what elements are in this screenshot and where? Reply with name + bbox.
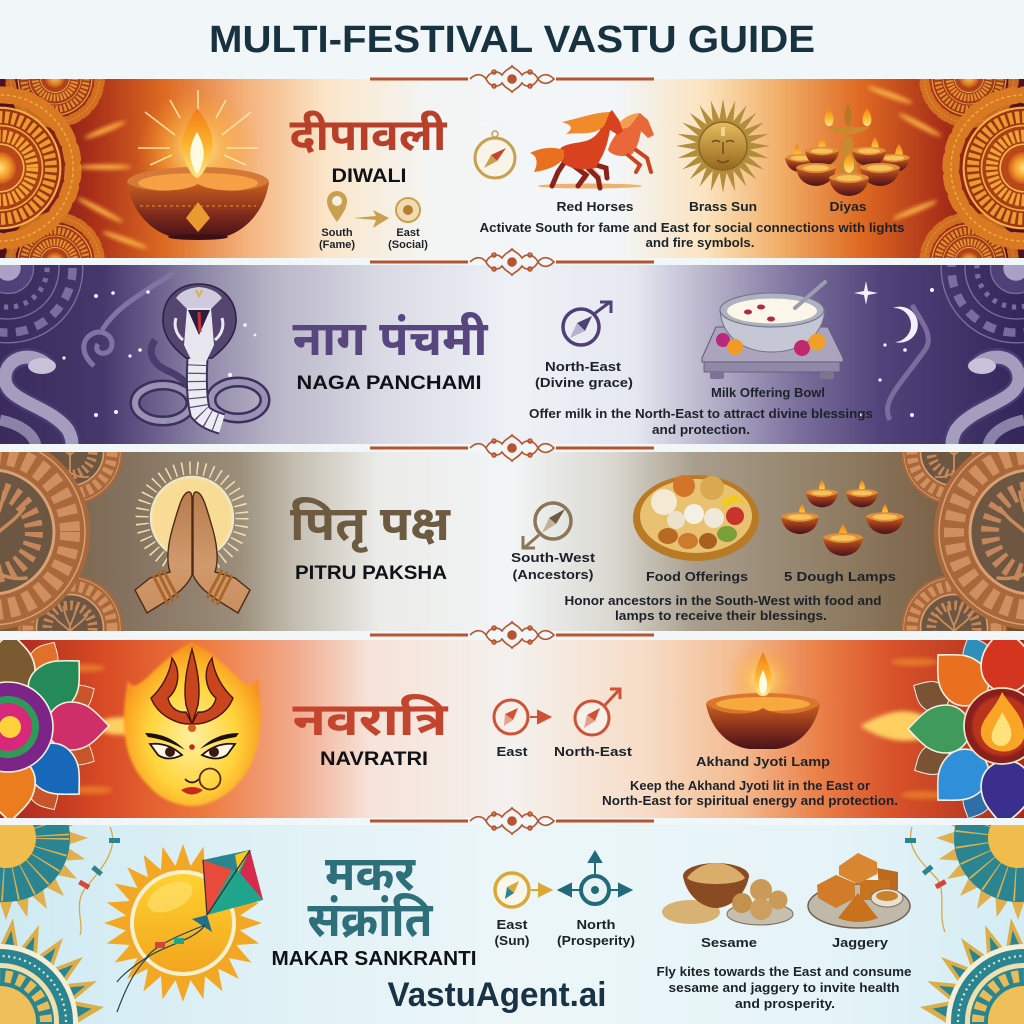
direction: East: East xyxy=(496,744,528,759)
front horse xyxy=(530,110,623,188)
direction: South pin: (Fame) xyxy=(319,239,355,251)
text: Pitru description: Honor ancestors in the South-West with food and xyxy=(564,594,882,608)
icon: Akhand Jyoti lamp xyxy=(706,644,820,749)
panel: Naga Panchami xyxy=(0,193,1024,446)
icon: brass sun xyxy=(676,99,770,193)
direction: East icon: East xyxy=(396,227,420,239)
ornament: divider 4 xyxy=(370,622,654,648)
icon: food offerings plate xyxy=(633,475,759,561)
heading: Navratri english: NAVRATRI xyxy=(320,749,428,770)
direction: South-West: South-West xyxy=(511,550,596,565)
decorative suns Makar xyxy=(0,756,1024,935)
direction: East icon xyxy=(388,198,428,251)
direction: South-West: (Ancestors) xyxy=(512,567,594,582)
icon: red horses xyxy=(530,110,654,188)
text: Navratri description xyxy=(602,779,898,808)
decorative ring right xyxy=(920,918,1024,1024)
label: Jaggery: Jaggery xyxy=(832,935,889,950)
direction: East icon: (Social) xyxy=(388,239,428,251)
panel: Makar Sankranti xyxy=(0,825,1024,1024)
decorative patterns Naga xyxy=(0,193,1024,446)
panel: Navratri xyxy=(0,640,1024,818)
direction: South pin: South xyxy=(321,227,353,239)
text: Makar description xyxy=(656,965,912,1011)
icon: cobra xyxy=(135,284,265,424)
text: Naga description: Offer milk in the North-East to attract divine blessings xyxy=(529,407,873,421)
direction: East (Sun): (Sun) xyxy=(494,933,530,948)
label: Sesame: Sesame xyxy=(701,935,757,950)
ornament: divider 3 xyxy=(370,435,654,461)
back horse xyxy=(584,113,654,180)
text: Makar description: sesame and jaggery to invite health xyxy=(668,981,900,995)
direction: North (Prosperity): (Prosperity) xyxy=(557,933,635,948)
label: Food Offerings: Food Offerings xyxy=(646,569,748,584)
text: Diwali description: and fire symbols. xyxy=(646,236,754,250)
icon: jaggery plate xyxy=(808,853,910,928)
heading: Pitru Paksha english: PITRU PAKSHA xyxy=(295,563,447,584)
heading: Diwali hindi: दीपावली xyxy=(290,110,448,160)
decorative mandalas Pitru xyxy=(0,399,1024,681)
icon: five dough lamps xyxy=(781,480,904,556)
direction: North-East xyxy=(535,302,633,390)
icon: goddess face xyxy=(124,642,261,806)
label: Red Horses: Red Horses xyxy=(556,199,634,214)
label: Milk Offering Bowl: Milk Offering Bowl xyxy=(711,385,825,400)
decorative chakras Navratri xyxy=(0,640,1024,818)
decorative ring left xyxy=(0,918,104,1024)
text: Makar description: Fly kites towards the East and consume xyxy=(656,965,912,979)
direction: North-East: North-East xyxy=(554,744,633,759)
label: 5 Dough Lamps: 5 Dough Lamps xyxy=(784,569,896,584)
direction: South-West xyxy=(511,503,596,582)
direction: East (Sun): East xyxy=(496,917,528,932)
direction: North-East: North-East xyxy=(545,359,622,374)
heading: Naga Panchami hindi: नाग पंचमी xyxy=(292,312,488,366)
text: Navratri description: Keep the Akhand Jyoti lit in the East or xyxy=(630,779,870,793)
direction: North-East: (Divine grace) xyxy=(535,375,633,390)
icon: milk offering bowl xyxy=(702,282,843,379)
heading: Pitru Paksha hindi: पितृ पक्ष xyxy=(290,497,451,553)
text: Pitru description: lamps to receive their blessings. xyxy=(615,609,827,623)
heading: Makar Sankranti hindi xyxy=(308,848,434,947)
text: Navratri description: North-East for spiritual energy and protection. xyxy=(602,794,898,808)
ornament: divider 5 xyxy=(370,808,654,834)
direction: North (Prosperity): North xyxy=(576,917,616,932)
text: Diwali description: Activate South for fame and East for social connections with lights xyxy=(480,221,904,235)
heading: Makar Sankranti hindi: मकर xyxy=(325,848,416,901)
label: Akhand Jyoti Lamp: Akhand Jyoti Lamp xyxy=(696,754,830,769)
text: Naga description xyxy=(529,407,873,437)
icon: namaste hands xyxy=(135,468,250,613)
text: Pitru description xyxy=(564,594,882,623)
direction: East (Sun) xyxy=(494,873,551,948)
ornament: divider 1 xyxy=(370,66,654,92)
direction: South pin xyxy=(319,191,355,251)
icon: sesame bowl and laddoos xyxy=(662,863,793,925)
heading: Diwali english: DIWALI xyxy=(332,166,406,187)
decorative mandalas Diwali xyxy=(0,79,1024,258)
label: Brass Sun: Brass Sun xyxy=(689,199,757,214)
ornament: divider 2 xyxy=(370,249,654,275)
direction: North (Prosperity) xyxy=(557,852,635,948)
icon: sun with kite xyxy=(104,844,263,1012)
text: Diwali description xyxy=(480,221,904,250)
icon: compass Diwali xyxy=(475,131,515,178)
heading: Makar Sankranti english: MAKAR SANKRANTI xyxy=(272,948,476,970)
direction: East xyxy=(494,700,550,759)
panel: Diwali xyxy=(0,33,1024,307)
title: MULTI-FESTIVAL VASTU GUIDE xyxy=(209,19,815,61)
icon: diyas group xyxy=(785,104,910,196)
heading: Makar Sankranti hindi: संक्रांति xyxy=(308,893,434,947)
arrow: South to East xyxy=(353,210,389,228)
heading: Naga Panchami english: NAGA PANCHAMI xyxy=(296,373,482,394)
text: Naga description: and protection. xyxy=(652,423,750,437)
label: Diyas: Diyas xyxy=(830,199,866,214)
brand: VastuAgent.ai: VastuAgent.ai xyxy=(388,976,606,1014)
icon: large diya xyxy=(127,88,269,240)
panel: Pitru Paksha xyxy=(0,452,1024,631)
direction: North-East xyxy=(554,689,633,759)
heading: Navratri hindi: नवरात्रि xyxy=(292,693,449,745)
text: Makar description: and prosperity. xyxy=(735,997,835,1011)
